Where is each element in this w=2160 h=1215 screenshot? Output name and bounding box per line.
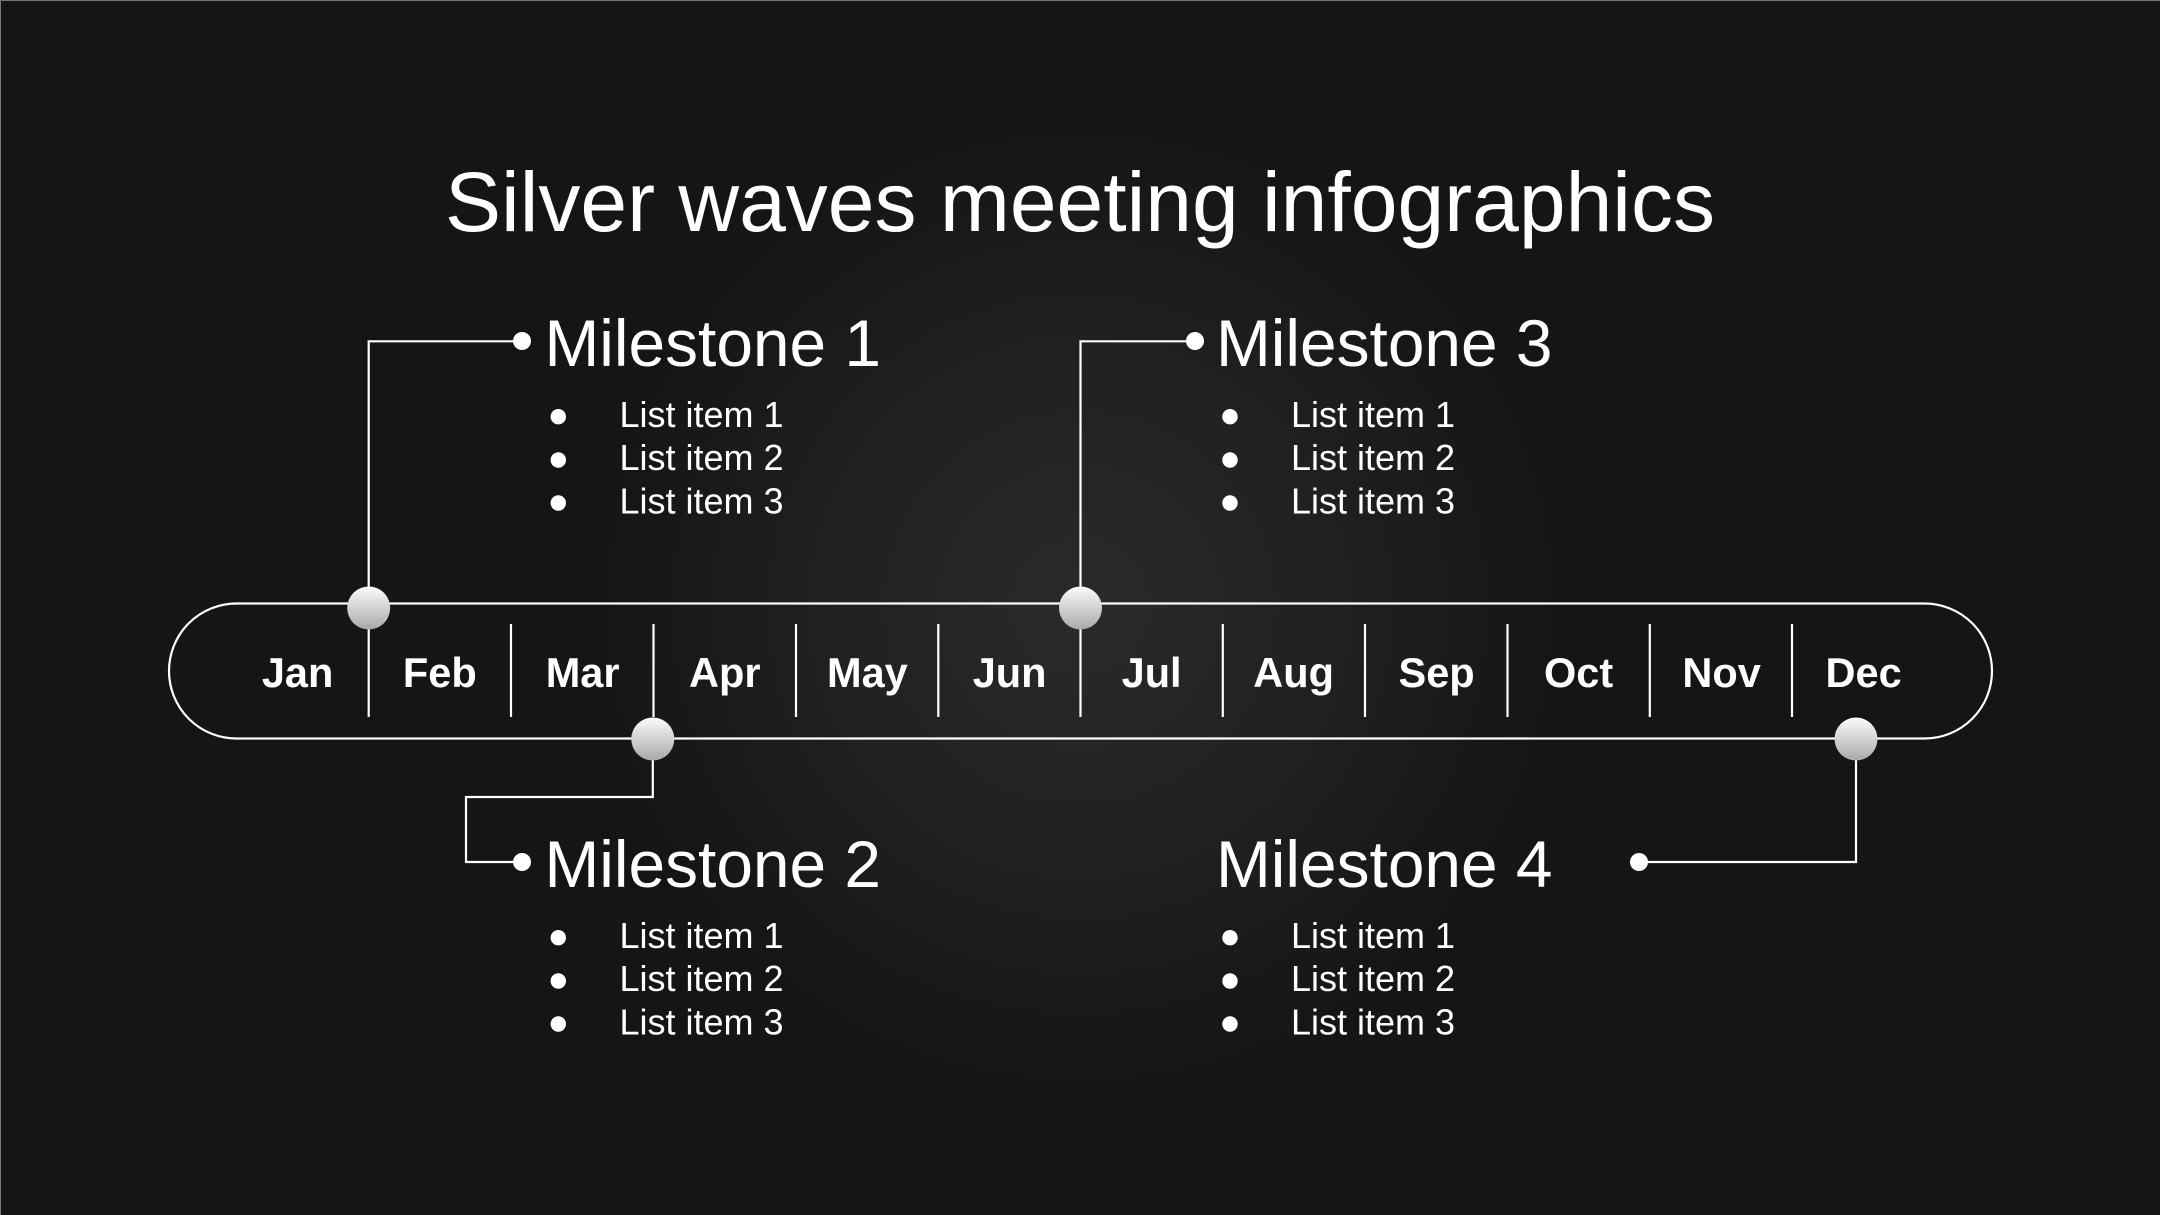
month labels: Aug (1253, 649, 1334, 696)
month labels: Dec (1826, 649, 1902, 696)
marker: January (347, 586, 390, 630)
month labels: Nov (1682, 649, 1761, 696)
milestone 3: List item 3 (1291, 480, 1455, 522)
timeline (169, 604, 1992, 738)
month labels (262, 649, 1902, 696)
milestone 4: List item 1 (1291, 915, 1455, 956)
timeline track (169, 604, 1992, 738)
month labels: Oct (1544, 649, 1613, 696)
milestone 3: List item 1 (1291, 394, 1455, 435)
marker: March (631, 718, 674, 760)
marker: December (1834, 718, 1878, 760)
milestone 1: List item 3 (620, 480, 784, 522)
milestone 1: Milestone 1 (544, 306, 881, 380)
marker: June (1059, 586, 1102, 630)
milestone 3 (1216, 306, 1552, 522)
connector: milestone 1 (369, 332, 531, 608)
month labels: Feb (403, 649, 477, 696)
month labels: Sep (1399, 649, 1475, 696)
milestone 2: Milestone 2 (544, 827, 881, 901)
month labels: Mar (546, 649, 620, 696)
milestone 2: List item 2 (620, 958, 784, 999)
milestone 1 (544, 306, 881, 522)
milestone 1: List item 2 (620, 437, 784, 478)
milestone 2: List item 3 (620, 1002, 784, 1042)
month labels: Jan (262, 649, 333, 696)
connector: milestone 2 (466, 739, 653, 871)
milestone 2 (544, 827, 881, 1042)
milestone 3: Milestone 3 (1216, 306, 1552, 380)
connector: milestone 4 (1630, 739, 1856, 871)
milestone 4: List item 3 (1291, 1002, 1455, 1042)
month labels: Apr (689, 649, 761, 696)
month labels: May (827, 649, 908, 696)
connector: milestone 3 (1080, 332, 1204, 608)
month labels: Jun (973, 649, 1046, 696)
milestone 1: List item 1 (620, 394, 784, 435)
month dividers (369, 624, 1792, 717)
milestone 4 (1216, 827, 1552, 1042)
month labels: Jul (1122, 649, 1182, 696)
milestone 4: Milestone 4 (1216, 827, 1552, 901)
milestone 2: List item 1 (620, 915, 784, 956)
title: Silver waves meeting infographics (445, 155, 1715, 249)
milestone 4: List item 2 (1291, 958, 1455, 999)
milestone 3: List item 2 (1291, 437, 1455, 478)
